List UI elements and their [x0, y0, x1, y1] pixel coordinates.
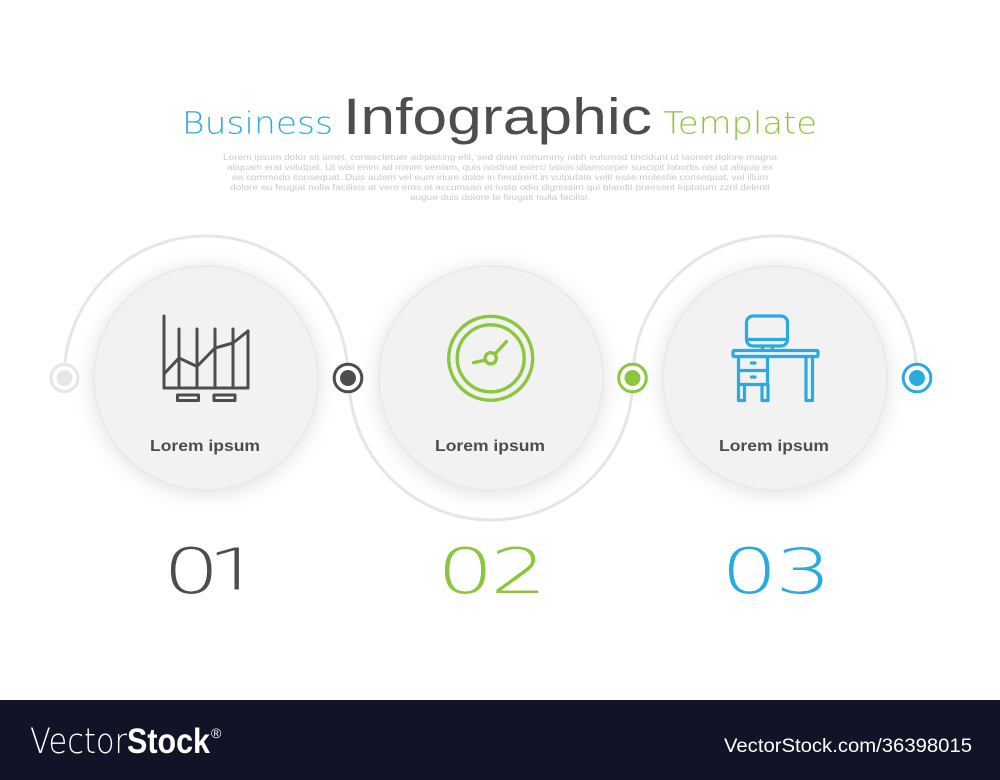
icon: bar and line chart	[164, 316, 248, 400]
footer logo: VectorStock	[30, 722, 210, 762]
label: step 3: Lorem ipsum	[719, 438, 829, 455]
number 02: 02	[437, 537, 547, 608]
label: step 2: Lorem ipsum	[435, 438, 545, 455]
node: dark	[334, 364, 362, 392]
description text block: Lorem ipsum dolor sit amet, consectetuer adipiscing elit, sed diam nonummy nibh euismod tincidunt ut laoreet dolore magna	[223, 152, 777, 162]
node: grey start	[51, 364, 78, 392]
title	[182, 88, 817, 145]
description text block: aliquam erat volutpat. Ut wisi enim ad minim veniam, quis nostrud exerci tation ullamcorper suscipit lobortis nisl ut aliquip ex	[227, 162, 774, 172]
label: step 1: Lorem ipsum	[150, 438, 260, 455]
registered mark: ®	[211, 725, 222, 741]
panel: step 3 disc	[663, 266, 887, 490]
panel: step 2 disc	[379, 266, 603, 490]
icon: desk with computer	[733, 316, 818, 400]
description text block	[223, 152, 777, 202]
panel: step 1 disc	[94, 266, 318, 490]
node: green	[619, 364, 646, 392]
number 01: 01	[163, 537, 264, 608]
icon: clock gauge	[449, 316, 533, 400]
title: Infographic	[343, 88, 652, 145]
node: blue	[903, 364, 931, 392]
description text block: ea commodo consequat. Duis autem vel eum iriure dolor in hendrerit in vulputate velit esse molestie consequat, vel illum	[232, 172, 768, 182]
footer image id: VectorStock.com/36398015	[724, 736, 972, 757]
title: Business	[182, 106, 333, 142]
description text block: augue duis dolore te feugait nulla facilisi.	[410, 192, 590, 202]
connector arcs	[65, 236, 916, 520]
footer bar	[0, 700, 1000, 780]
description text block: dolore eu feugiat nulla facilisis at vero eros et accumsan et iusto odio dignissim qui blandit praesent luptatum zzril delenit	[230, 182, 771, 192]
number 03: 03	[721, 537, 832, 608]
title: Template	[663, 106, 817, 142]
